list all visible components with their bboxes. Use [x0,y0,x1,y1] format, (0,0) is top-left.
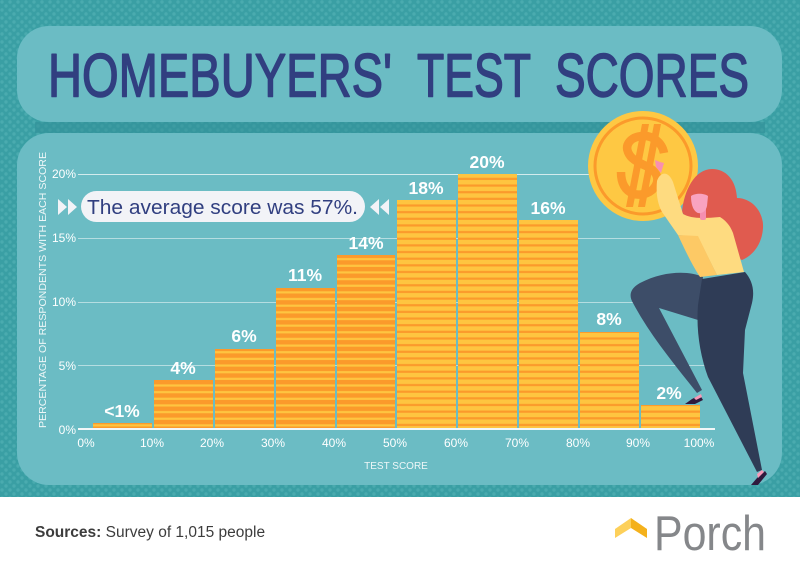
x axis ticks: 20% [200,436,224,450]
sources text: Sources: Survey of 1,015 people [35,524,265,541]
y axis ticks: 0% [59,423,76,437]
grid lines [78,174,710,366]
x axis ticks: 90% [626,436,650,450]
bar value labels [104,152,682,421]
y axis ticks: 5% [59,359,76,373]
torso and arm [657,174,744,275]
bar value labels: 18% [408,178,444,198]
logo: Porch [615,507,766,561]
hair [682,169,763,260]
bar chart [38,152,715,472]
right arrows [370,199,389,215]
title panel [17,26,782,122]
y axis ticks: 20% [52,167,76,181]
finger [655,160,664,173]
bars [93,174,700,429]
illustration: woman lifting coin [588,111,767,485]
x axis ticks: 100% [684,436,715,450]
bar value labels: 16% [530,198,566,218]
x axis ticks: 40% [322,436,346,450]
back leg [631,273,703,393]
neck [700,207,706,220]
bar value labels: 20% [469,152,505,172]
y axis ticks [52,167,76,437]
footer background [0,497,800,566]
title: TEST [417,42,531,110]
torso shade [678,235,717,277]
x axis title: TEST SCORE [364,461,428,472]
logo: Porch: Porch [654,507,766,561]
icon: chevron [615,518,647,538]
x axis ticks: 70% [505,436,529,450]
back foot [694,394,702,400]
front foot [757,470,764,478]
title: HOMEBUYERS' [48,42,392,110]
callout: average score [58,191,389,222]
x axis ticks: 30% [261,436,285,450]
bar value labels: 4% [170,358,196,378]
bar value labels: 8% [596,309,622,329]
y axis ticks: 10% [52,295,76,309]
face [691,194,708,213]
left arrows [58,199,77,215]
x axis ticks: 50% [383,436,407,450]
bar value labels: 11% [288,265,322,285]
front leg [697,272,762,472]
y axis ticks: 15% [52,231,76,245]
bar value labels: 14% [348,233,384,253]
x axis ticks: 60% [444,436,468,450]
x axis ticks: 80% [566,436,590,450]
chart panel [17,133,782,485]
y axis title: PERCENTAGE OF RESPONDENTS WITH EACH SCORE [38,152,49,428]
title [48,42,749,110]
callout: average score: The average score was 57%. [87,197,358,219]
back shoe [685,395,703,404]
icon: coin [588,111,698,221]
bar value labels: 6% [231,326,257,346]
x axis line [78,428,715,430]
x axis ticks [77,436,715,450]
x axis ticks: 10% [140,436,164,450]
front shoe [751,471,767,485]
bar value labels: <1% [104,401,140,421]
x axis ticks: 0% [77,436,95,450]
bar value labels: 2% [656,383,682,403]
panel shadow band [35,122,765,133]
